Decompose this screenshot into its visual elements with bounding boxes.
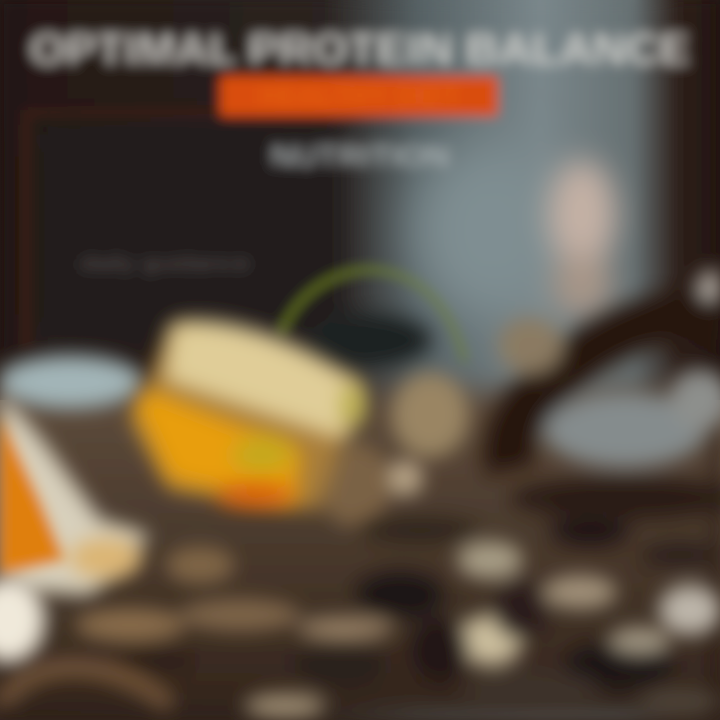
yellow butter block (130, 321, 364, 510)
orange highlight banner (220, 76, 498, 116)
pale blue plate (0, 356, 142, 408)
dark coiled food on the right (498, 271, 720, 520)
subtitle text: NUTRITION (271, 140, 449, 173)
pile of dark and tan nuts (0, 512, 720, 718)
small tan nuggets beside the butter (319, 373, 468, 527)
title text: OPTIMAL PROTEIN BALANCE (30, 25, 690, 74)
orange citrus slices on the left (0, 390, 150, 662)
background figure (548, 160, 616, 317)
orange highlight banner: HEALTHY DIET (258, 80, 460, 111)
caption text on dark panel: daily guidance (80, 253, 250, 275)
table floor (0, 314, 720, 720)
green arc (280, 270, 465, 362)
